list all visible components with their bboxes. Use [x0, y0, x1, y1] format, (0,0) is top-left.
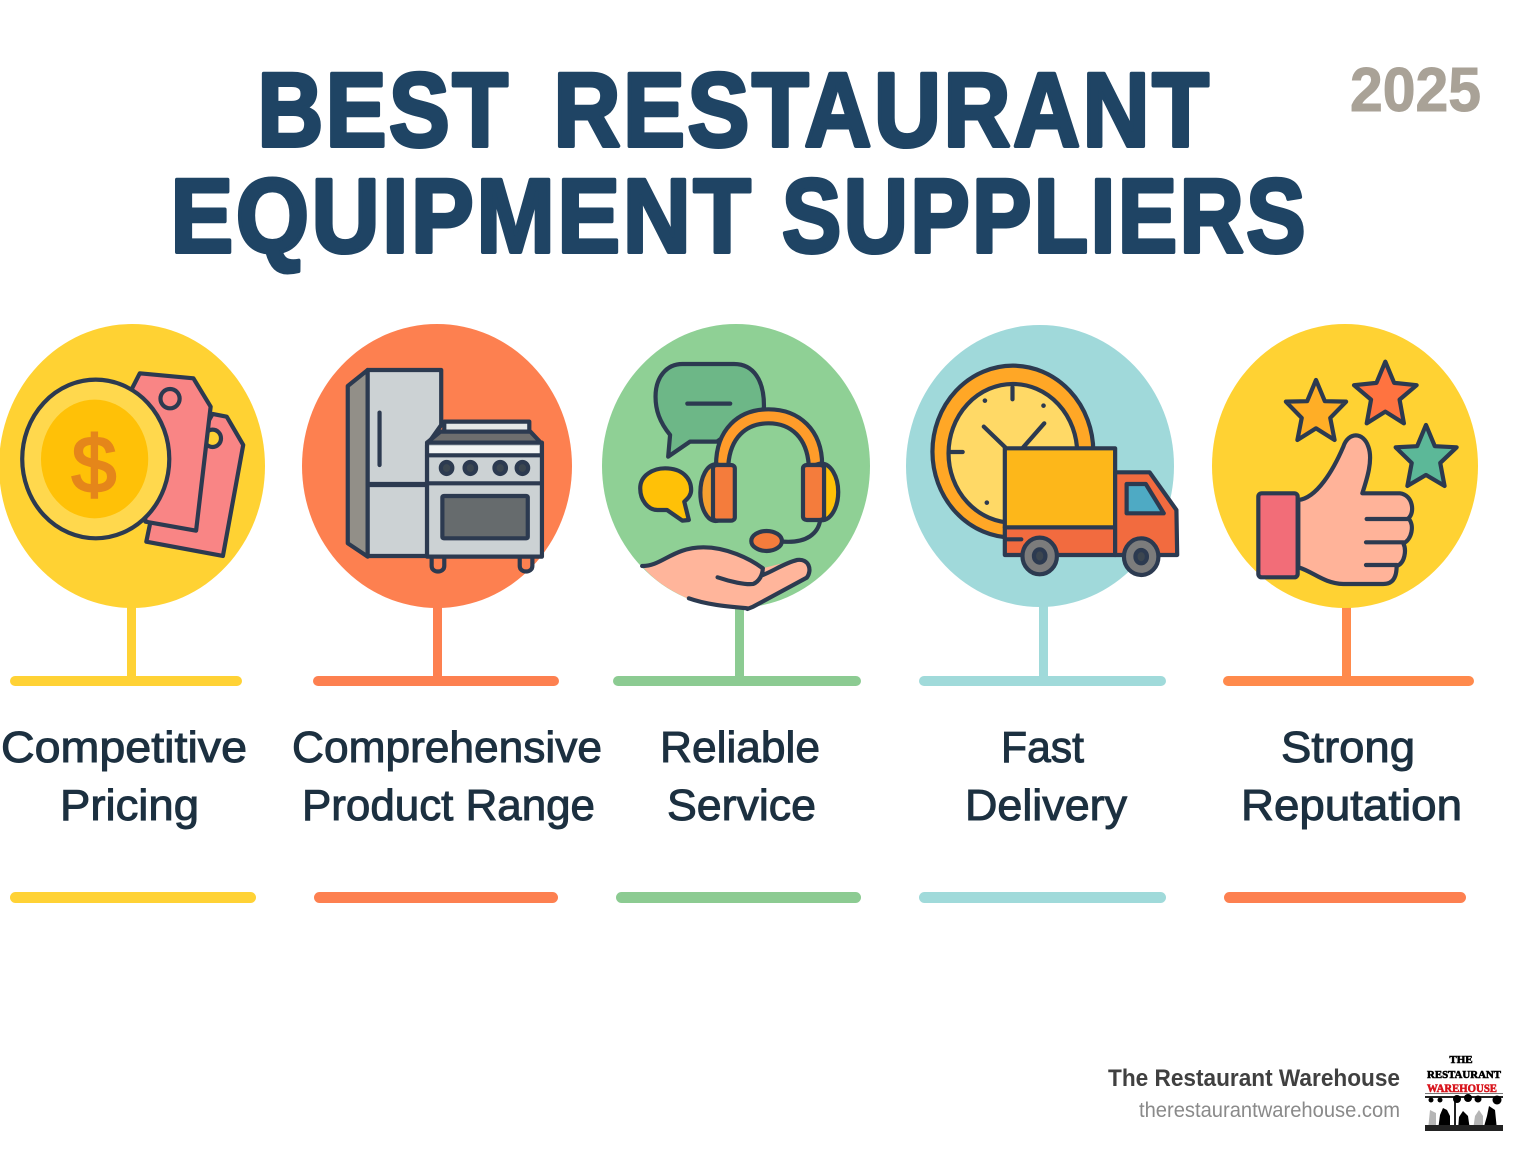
icon: thumbs up — [1258, 435, 1412, 584]
bottom bar — [1224, 892, 1466, 903]
label: fast delivery: Fast — [1001, 723, 1084, 772]
footer logo: WAREHOUSE — [1427, 1081, 1497, 1095]
circle background — [0, 324, 265, 608]
icon: delivery truck — [1005, 448, 1177, 575]
bottom bar — [919, 892, 1166, 903]
footer brand text: The Restaurant Warehouse — [1108, 1065, 1400, 1092]
circle background — [302, 324, 572, 608]
footer brand text: therestaurantwarehouse.com — [1139, 1099, 1400, 1122]
stem and top bar — [313, 600, 559, 686]
footer brand text — [1108, 1065, 1400, 1122]
panel: competitive pricing — [0, 324, 265, 903]
bottom bar — [10, 892, 256, 903]
label: strong reputation: Strong — [1281, 723, 1415, 772]
icon: coin and price tags — [22, 373, 243, 556]
label: strong reputation: Reputation — [1241, 781, 1462, 830]
panel: strong reputation — [1212, 324, 1478, 903]
title: BEST — [258, 52, 510, 169]
stem and top bar — [613, 606, 861, 686]
circle background — [1212, 324, 1478, 608]
panel: comprehensive product range — [292, 324, 602, 903]
title — [170, 52, 1308, 275]
year label: 2025 — [1350, 56, 1481, 125]
icon: fridge and range — [348, 370, 542, 571]
circle background — [906, 325, 1174, 607]
label: comprehensive product range: Comprehensive — [292, 723, 602, 772]
icon: hand — [642, 547, 810, 609]
title: SUPPLIERS — [782, 158, 1308, 275]
circle background — [602, 324, 870, 608]
icon: dollar sign: $ — [72, 420, 116, 509]
label: reliable service: Reliable — [660, 723, 820, 772]
footer logo: THE — [1449, 1054, 1473, 1066]
bottom bar — [616, 892, 861, 903]
label: comprehensive product range: Product Range — [302, 781, 595, 830]
label: fast delivery: Delivery — [965, 781, 1127, 830]
footer logo: RESTAURANT — [1427, 1069, 1502, 1081]
label: competitive pricing: Pricing — [60, 781, 199, 830]
label: reliable service: Service — [667, 781, 816, 830]
stem and top bar — [919, 600, 1166, 686]
stem and top bar — [10, 600, 242, 686]
footer logo — [1425, 1054, 1503, 1131]
bottom bar — [314, 892, 558, 903]
stem and top bar — [1223, 600, 1474, 686]
icon: speech bubbles and headset — [640, 364, 838, 551]
panel: fast delivery — [906, 325, 1177, 903]
title: EQUIPMENT — [170, 158, 754, 275]
title: RESTAURANT — [554, 52, 1212, 169]
icon: clock — [932, 366, 1093, 538]
icon: three stars — [1286, 362, 1457, 486]
panel: reliable service — [602, 324, 870, 903]
label: competitive pricing: Competitive — [1, 723, 247, 772]
